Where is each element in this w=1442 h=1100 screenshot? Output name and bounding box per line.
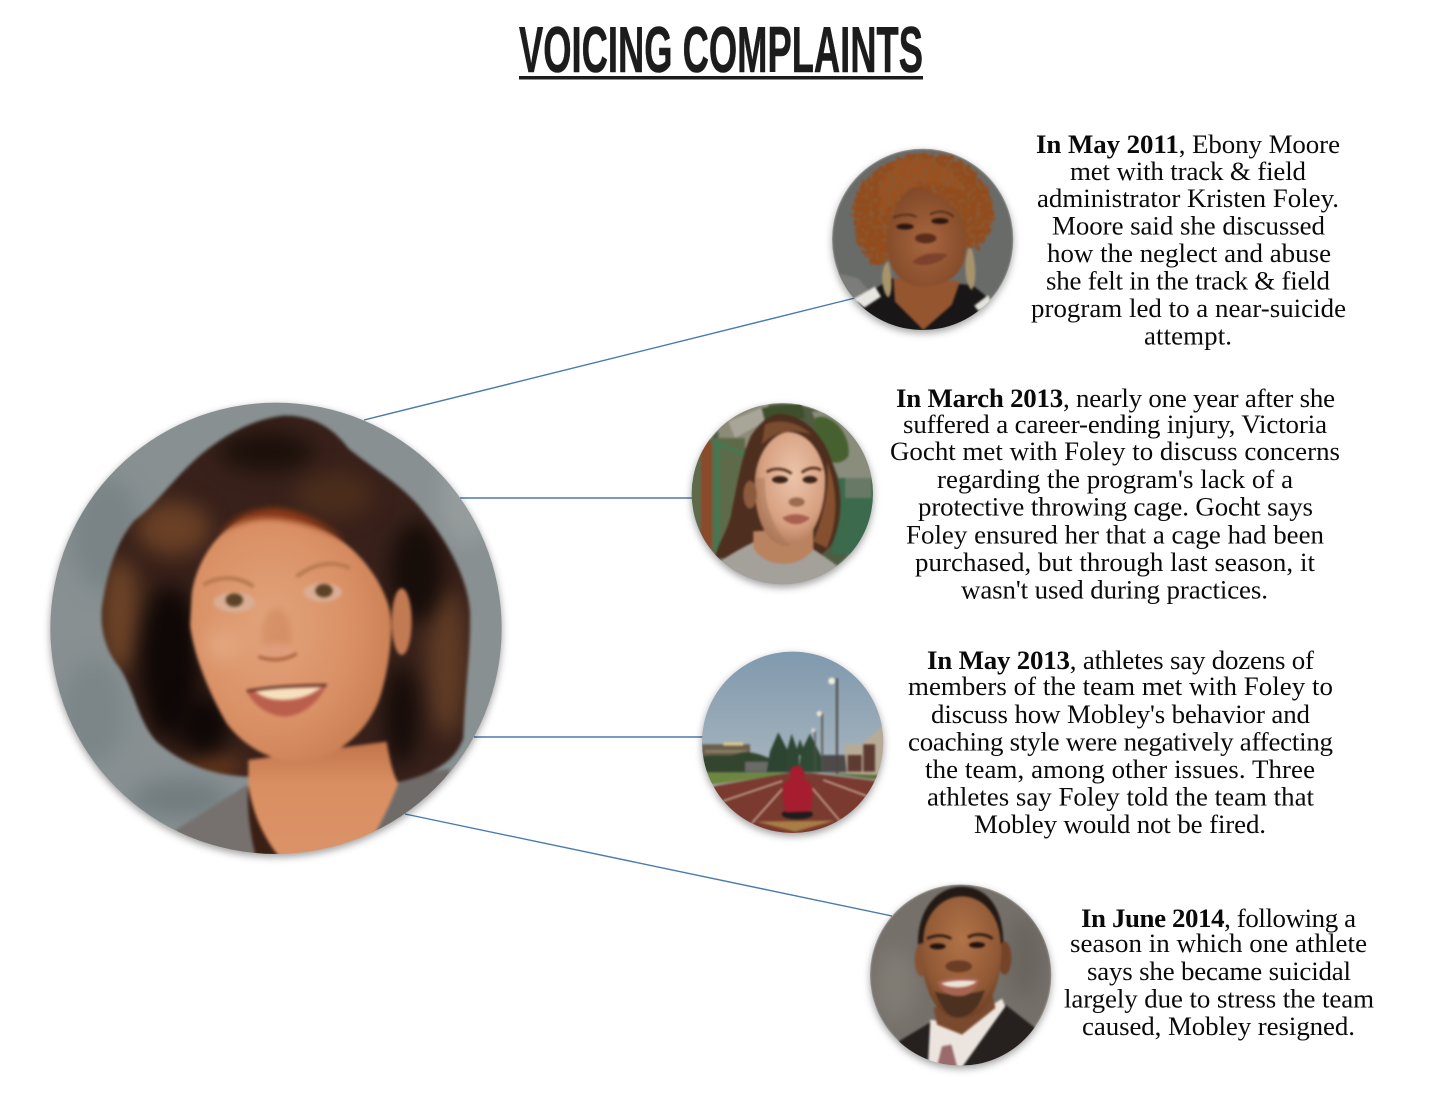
text block: May 2011: attempt. xyxy=(1144,320,1232,350)
text block: March 2013: suffered a career-ending injury, Victoria xyxy=(903,409,1327,439)
text block: June 2014: largely due to stress the team xyxy=(1064,984,1374,1014)
text block: May 2013: members of the team met with Foley to xyxy=(908,671,1333,701)
text block: June 2014 xyxy=(1064,903,1374,1041)
text block: May 2011: how the neglect and abuse xyxy=(1047,238,1331,268)
text block: June 2014: says she became suicidal xyxy=(1087,956,1351,986)
text block: May 2013: discuss how Mobley's behavior and xyxy=(931,699,1311,729)
text block: May 2011 xyxy=(1031,129,1346,350)
text block: June 2014: In June 2014, following a xyxy=(1081,903,1356,933)
portrait: Mobley xyxy=(870,884,1051,1071)
text block: May 2013: the team, among other issues. Three xyxy=(925,754,1315,784)
text block: March 2013: Gocht met with Foley to discuss concerns xyxy=(890,436,1340,466)
photo: athlete sitting on track xyxy=(695,645,895,838)
text block: May 2011: Moore said she discussed xyxy=(1052,210,1326,240)
portrait: Victoria Gocht xyxy=(688,403,875,595)
text block: May 2011: met with track & field xyxy=(1070,156,1307,186)
text block: March 2013: purchased, but through last season, it xyxy=(915,547,1316,577)
text block: May 2011: In May 2011, Ebony Moore xyxy=(1036,129,1340,159)
portrait: Kristen Foley xyxy=(47,398,507,862)
text block: May 2011: program led to a near-suicide xyxy=(1031,293,1346,323)
text block: March 2013: protective throwing cage. Gocht says xyxy=(918,492,1313,522)
text block: March 2013: regarding the program's lack of a xyxy=(937,464,1293,494)
text block: May 2013: athletes say Foley told the team that xyxy=(927,782,1315,812)
text block: March 2013: In March 2013, nearly one year after she xyxy=(896,383,1335,413)
text block: March 2013: wasn't used during practices. xyxy=(961,574,1268,604)
text block: March 2013 xyxy=(890,383,1340,604)
title: VOICING COMPLAINTS xyxy=(519,13,923,86)
text block: May 2013: coaching style were negatively affecting xyxy=(908,726,1333,756)
text block: May 2011: administrator Kristen Foley. xyxy=(1037,183,1339,213)
text block: May 2013: In May 2013, athletes say dozens of xyxy=(927,645,1314,675)
text block: May 2013: Mobley would not be fired. xyxy=(974,809,1266,839)
portrait: Ebony Moore xyxy=(832,149,1013,338)
text block: June 2014: season in which one athlete xyxy=(1070,928,1367,958)
text block: June 2014: caused, Mobley resigned. xyxy=(1082,1011,1355,1041)
connector lines xyxy=(364,298,892,916)
text block: May 2011: she felt in the track & field xyxy=(1046,266,1331,296)
title xyxy=(519,13,923,86)
text block: March 2013: Foley ensured her that a cage had been xyxy=(906,520,1325,550)
text block: May 2013 xyxy=(908,645,1333,839)
